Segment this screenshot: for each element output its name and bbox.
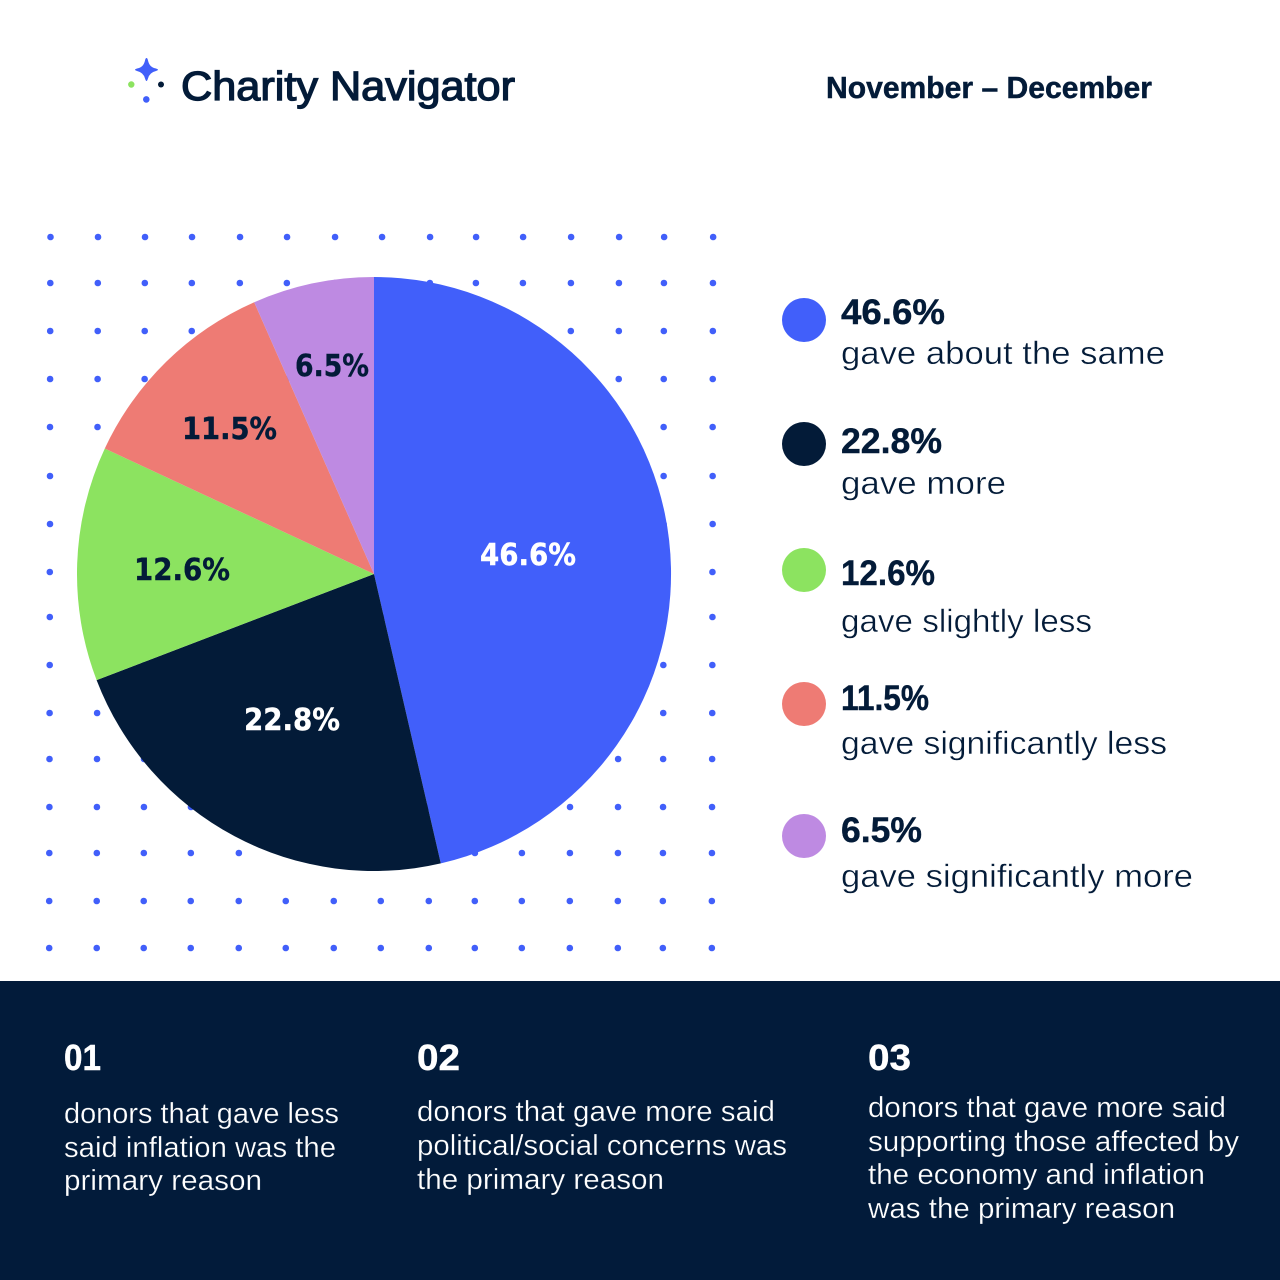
logo wordmark: Charity Navigator: [181, 63, 515, 109]
pie label 46.6%: 46.6%: [480, 538, 576, 573]
finding 01: [64, 1037, 339, 1197]
legend item: 11.5%: gave significantly less: [841, 725, 1167, 761]
legend item: 6.5%: gave significantly more: [841, 858, 1193, 894]
finding 02: 02: [417, 1037, 460, 1078]
finding 01: donors that gave less: [64, 1098, 339, 1130]
pie chart: [77, 277, 671, 871]
legend item: 46.6%: 46.6%: [841, 293, 945, 332]
slice: 22.8% gave more: [97, 574, 441, 871]
legend item: 11.5%: [782, 679, 1167, 761]
finding 02: the primary reason: [417, 1164, 664, 1196]
pie label 6.5%: 6.5%: [295, 349, 369, 384]
slice: 11.5% gave significantly less: [105, 302, 374, 574]
icon: sparkle star with dots: [128, 58, 164, 103]
logo: Charity Navigator: [128, 58, 515, 109]
finding 03: [867, 1037, 1239, 1225]
slice: 46.6% gave about the same: [374, 277, 671, 863]
finding 01: said inflation was the: [64, 1132, 336, 1164]
pie label 11.5%: 11.5%: [182, 412, 277, 447]
finding 01: 01: [64, 1037, 101, 1078]
legend item: 12.6%: 12.6%: [841, 554, 935, 593]
legend item: 12.6%: [782, 548, 1092, 639]
finding 02: donors that gave more said: [417, 1096, 775, 1128]
finding 03: supporting those affected by: [868, 1126, 1239, 1158]
finding 03: the economy and inflation: [868, 1159, 1205, 1191]
finding 03: was the primary reason: [867, 1193, 1175, 1225]
legend item: 22.8%: [782, 422, 1006, 501]
legend item: 22.8%: gave more: [841, 465, 1006, 501]
pie label 12.6%: 12.6%: [134, 553, 230, 588]
legend: [782, 293, 1193, 894]
legend item: 12.6%: gave slightly less: [841, 603, 1092, 639]
slice: 12.6% gave slightly less: [77, 448, 374, 680]
finding 02: [417, 1037, 787, 1196]
pie label 22.8%: 22.8%: [244, 703, 340, 738]
legend item: 46.6%: [782, 293, 1165, 371]
date range heading: November – December: [826, 70, 1152, 105]
legend item: 46.6%: gave about the same: [841, 335, 1165, 371]
slice: 6.5% gave significantly more: [254, 277, 374, 574]
finding 02: political/social concerns was: [417, 1130, 787, 1162]
legend item: 6.5%: 6.5%: [841, 811, 922, 850]
dot grid background: [49, 237, 713, 948]
legend item: 22.8%: 22.8%: [841, 422, 942, 461]
finding 01: primary reason: [64, 1165, 262, 1197]
legend item: 11.5%: 11.5%: [841, 679, 929, 718]
legend item: 6.5%: [782, 811, 1193, 894]
finding 03: 03: [868, 1037, 911, 1078]
finding 03: donors that gave more said: [868, 1092, 1226, 1124]
panel: key findings: [0, 981, 1280, 1280]
